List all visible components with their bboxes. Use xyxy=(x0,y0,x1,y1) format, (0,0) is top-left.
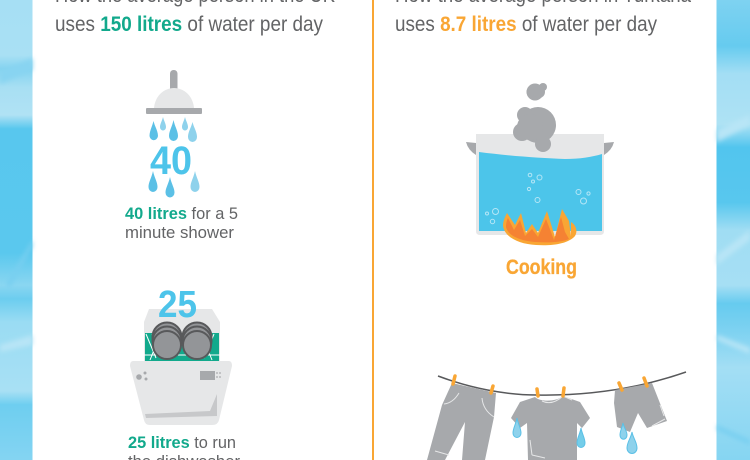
text: dishwasher caption: 25 litres to run xyxy=(128,433,236,452)
number 40: 40 xyxy=(150,139,192,183)
shower dome xyxy=(154,88,194,108)
icon: dishwasher xyxy=(130,284,232,425)
shower handle xyxy=(170,70,178,94)
heading: UK usage: uses 150 litres of water per day xyxy=(55,13,323,36)
trousers highlights xyxy=(435,393,494,455)
green rack panel xyxy=(145,333,219,361)
icon: washing line xyxy=(427,372,686,460)
text: shower caption: 40 litres for a 5 xyxy=(125,204,238,223)
text: dishwasher caption xyxy=(128,433,240,460)
divider xyxy=(372,0,374,460)
bubbles xyxy=(486,173,590,224)
door buttons xyxy=(136,371,221,380)
door shade xyxy=(145,394,217,418)
shower plate xyxy=(146,108,202,114)
text: cooking label: Cooking xyxy=(506,256,577,279)
flame xyxy=(503,209,576,245)
icon: cooking pot xyxy=(466,83,614,245)
number 25: 25 xyxy=(158,284,197,326)
icon: shower xyxy=(146,70,202,198)
rack wires xyxy=(143,334,221,360)
line xyxy=(438,372,686,395)
pegs xyxy=(453,376,647,396)
t-shirt highlights xyxy=(530,396,572,458)
dishwasher door xyxy=(130,361,232,425)
heading: Turkana usage: uses 8.7 litres of water per day xyxy=(395,13,657,36)
text: shower caption: minute shower xyxy=(125,223,234,242)
wet drips xyxy=(513,418,637,454)
background: water texture left xyxy=(0,0,32,460)
text: shower caption xyxy=(125,204,238,242)
upper drops xyxy=(150,117,197,142)
shorts highlight xyxy=(652,405,665,426)
dishwasher top xyxy=(144,309,220,362)
plates xyxy=(152,322,212,359)
t-shirt xyxy=(511,396,590,460)
lower drops xyxy=(148,171,200,198)
heading: UK usage xyxy=(55,0,335,36)
pot body xyxy=(476,134,604,235)
pot handles xyxy=(466,142,614,155)
water xyxy=(479,152,602,231)
trousers xyxy=(427,383,496,460)
background: water texture right xyxy=(716,0,750,460)
heading: Turkana usage xyxy=(395,0,691,36)
steam xyxy=(513,83,556,152)
shorts xyxy=(614,383,667,432)
